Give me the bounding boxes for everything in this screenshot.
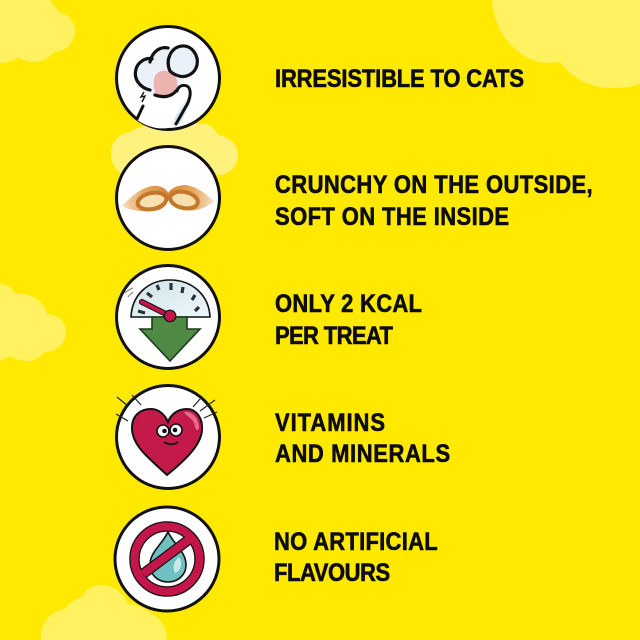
icon: calorie gauge with down arrow bbox=[116, 266, 220, 368]
heading: irresistible to cats: IRRESISTIBLE TO CATS bbox=[275, 65, 524, 92]
heading: only 2 kcal bbox=[275, 290, 422, 349]
heading: vitamins and minerals: VITAMINS bbox=[275, 409, 385, 436]
icon: crunchy treats bbox=[116, 146, 220, 250]
heading: no artificial flavours bbox=[274, 528, 438, 586]
icon: no artificial flavours bbox=[115, 507, 219, 611]
cloud: middle left bbox=[0, 284, 66, 361]
heading: crunchy and soft: CRUNCHY ON THE OUTSIDE, bbox=[275, 171, 593, 198]
cloud: top left bbox=[0, 0, 75, 63]
icon: cat paw bbox=[116, 26, 220, 130]
heading: no artificial flavours: NO ARTIFICIAL bbox=[274, 528, 438, 555]
cloud: bottom bbox=[41, 585, 167, 640]
heading: crunchy and soft bbox=[275, 171, 593, 230]
cloud: top right bbox=[492, 0, 640, 88]
icon: smiling heart bbox=[116, 386, 220, 488]
heading: vitamins and minerals bbox=[275, 409, 450, 467]
heading: only 2 kcal: PER TREAT bbox=[275, 322, 394, 349]
heading: crunchy and soft: SOFT ON THE INSIDE bbox=[275, 203, 509, 230]
heading: no artificial flavours: FLAVOURS bbox=[274, 559, 390, 586]
heading: vitamins and minerals: AND MINERALS bbox=[275, 440, 450, 467]
cloud: behind crunchy icon bbox=[111, 124, 238, 175]
heading: only 2 kcal: ONLY 2 KCAL bbox=[275, 290, 422, 317]
